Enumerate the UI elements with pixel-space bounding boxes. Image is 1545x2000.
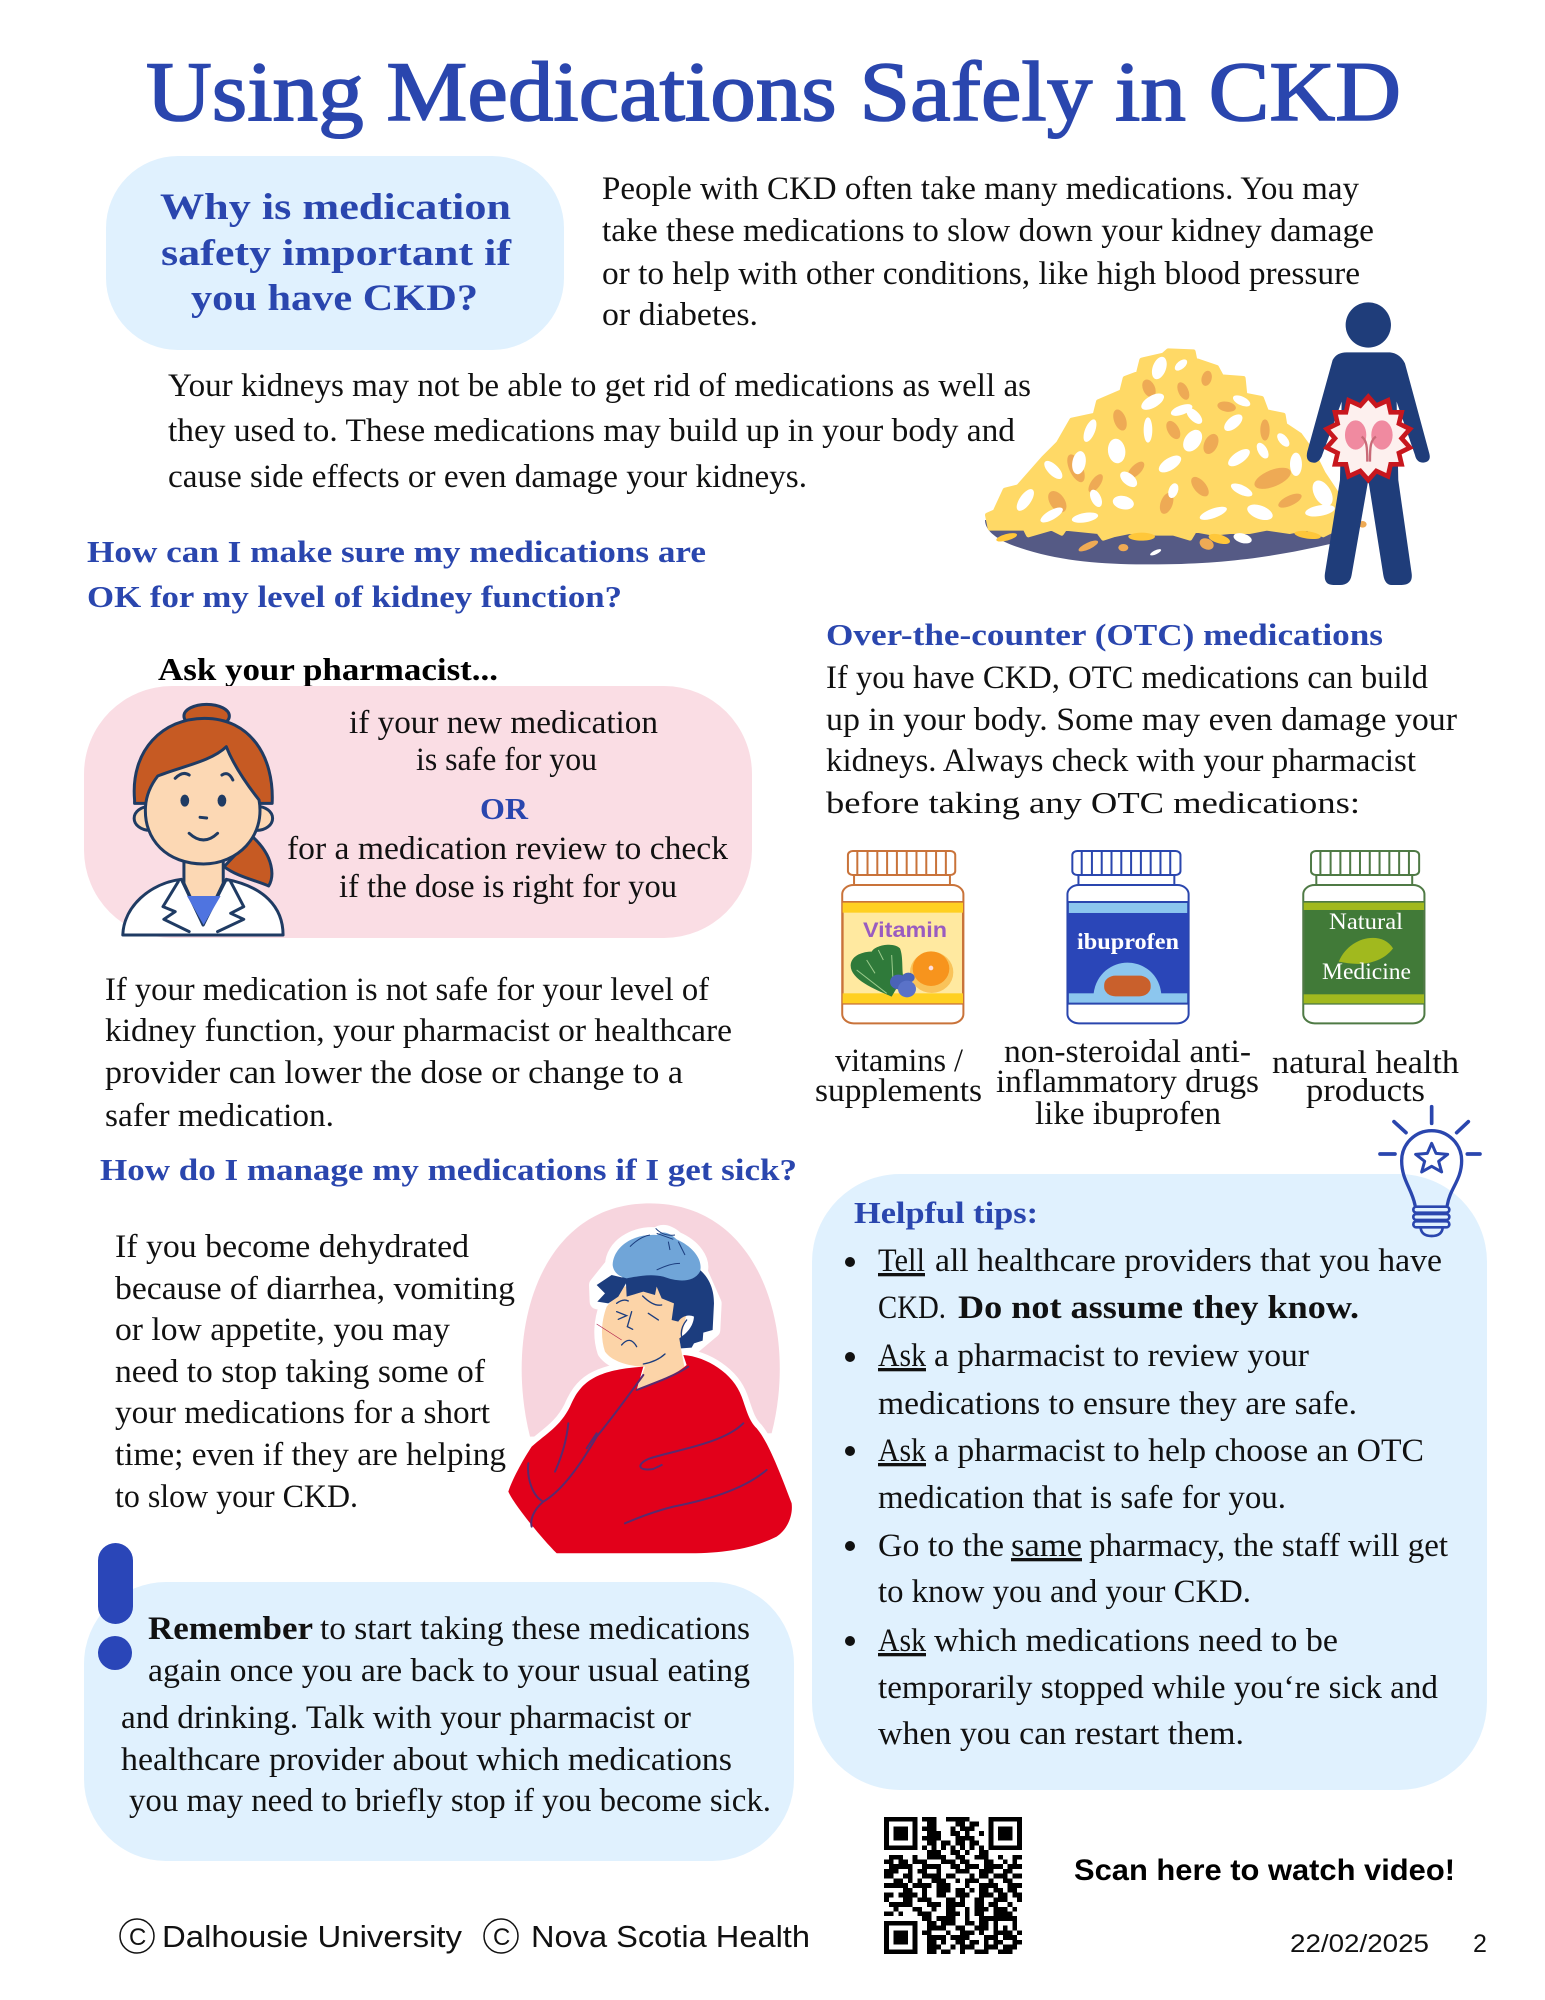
icon: vitamin bottle	[842, 851, 963, 1023]
text block: OTC paragraph: up in your body. Some may even damage your	[826, 702, 1457, 738]
text block: intro paragraph: People with CKD often take many medications. You may	[602, 171, 1359, 207]
text block: kidneys paragraph: they used to. These medications may build up in your body and	[168, 413, 1015, 449]
footer: Nova Scotia Health copyright: C	[493, 1924, 510, 1951]
footer: Dalhousie University copyright: C	[129, 1924, 146, 1951]
list: tips: all healthcare providers that you have	[935, 1243, 1442, 1279]
list: tips: a pharmacist to help choose an OTC	[934, 1433, 1424, 1469]
text block: pharmacist questions: for a medication review to check	[287, 831, 729, 867]
icon: natural medicine bottle: Natural	[1329, 909, 1403, 934]
list: tips: which medications need to be	[934, 1623, 1338, 1659]
heading: ask your pharmacist: Ask your pharmacist...	[158, 651, 498, 687]
panel: ask your pharmacist	[84, 686, 752, 938]
text block: sick paragraph: If you become dehydrated	[115, 1229, 470, 1265]
footer: Nova Scotia Health copyright: Nova Scotia Health	[531, 1919, 810, 1954]
list: tips: Do not assume they know.	[958, 1290, 1359, 1326]
label: NSAIDs: non-steroidal anti-	[1004, 1034, 1251, 1070]
panel: why is medication safety important: you have CKD?	[191, 278, 478, 319]
text block: unsafe medication paragraph: kidney function, your pharmacist or healthcare	[105, 1013, 732, 1049]
list: tips: CKD.	[878, 1290, 946, 1326]
text block: pharmacist questions: OR	[480, 791, 529, 826]
illustration: pile of pills and person with kidneys	[985, 302, 1430, 585]
text block: unsafe medication paragraph: safer medication.	[105, 1098, 334, 1134]
list: tips: Tell	[878, 1243, 925, 1279]
text block: intro paragraph: or diabetes.	[602, 297, 758, 333]
icon: lightbulb	[1380, 1107, 1480, 1236]
panel: why is medication safety important: safety important if	[161, 233, 512, 274]
text block: OTC paragraph: kidneys. Always check with your pharmacist	[826, 743, 1416, 779]
list: tips: Ask	[878, 1433, 926, 1469]
text block: pharmacist questions: if your new medication	[349, 705, 658, 741]
heading: helpful tips: Helpful tips:	[854, 1195, 1038, 1230]
icon: person	[1307, 302, 1430, 585]
label: NSAIDs	[996, 1034, 1259, 1132]
list: tips	[845, 1243, 1448, 1752]
list: tips: medication that is safe for you.	[878, 1480, 1286, 1516]
list: tips: a pharmacist to review your	[934, 1338, 1309, 1374]
text block: kidneys paragraph	[168, 368, 1031, 495]
title: Using Medications Safely in CKD	[146, 45, 1401, 139]
list: tips: pharmacy, the staff will get	[1089, 1528, 1448, 1564]
text block: pharmacist questions	[287, 705, 729, 905]
icon: ibuprofen bottle: ibuprofen	[1077, 929, 1179, 954]
label: natural health products	[1272, 1045, 1460, 1109]
heading: level of kidney function: OK for my level of kidney function?	[87, 579, 622, 614]
text block: OTC paragraph: If you have CKD, OTC medications can build	[826, 660, 1428, 696]
text block: sick paragraph	[115, 1229, 515, 1515]
text block: pharmacist questions: is safe for you	[416, 742, 597, 778]
label: vitamins: supplements	[815, 1073, 982, 1109]
text block: pharmacist questions: if the dose is right for you	[339, 869, 677, 905]
text: scan here: Scan here to watch video!	[1074, 1854, 1455, 1887]
text block: kidneys paragraph: cause side effects or even damage your kidneys.	[168, 459, 807, 495]
QR code	[884, 1817, 1022, 1954]
heading: level of kidney function	[87, 534, 706, 614]
panel: why is medication safety important	[106, 156, 564, 350]
list: tips: when you can restart them.	[878, 1716, 1244, 1752]
label: natural health products: products	[1306, 1073, 1425, 1109]
label: natural health products: natural health	[1272, 1045, 1460, 1081]
text block: sick paragraph: or low appetite, you may	[115, 1312, 450, 1348]
footer: page number: 2	[1473, 1930, 1487, 1958]
text block: sick paragraph: time; even if they are helping	[115, 1437, 506, 1473]
text block: remember paragraph: again once you are back to your usual eating	[148, 1653, 750, 1689]
text block: sick paragraph: because of diarrhea, vomiting	[115, 1271, 515, 1307]
list: tips: temporarily stopped while you‘re sick and	[878, 1670, 1438, 1706]
text block: sick paragraph: your medications for a short	[115, 1395, 490, 1431]
icon: pharmacist	[123, 704, 283, 935]
icon: vitamin bottle: Vitamin	[863, 919, 947, 942]
label: vitamins	[815, 1043, 982, 1109]
text block: remember paragraph: to start taking these medications	[320, 1611, 750, 1647]
icon: natural medicine bottle: Medicine	[1322, 959, 1411, 984]
text block: OTC paragraph	[826, 660, 1457, 820]
list: tips: Ask	[878, 1623, 926, 1659]
list: tips: medications to ensure they are safe.	[878, 1386, 1357, 1422]
icon: ibuprofen bottle	[1067, 851, 1189, 1023]
footer: Dalhousie University copyright: Dalhousie University	[162, 1919, 463, 1954]
label: vitamins: vitamins /	[835, 1043, 964, 1079]
panel: helpful tips	[812, 1174, 1487, 1790]
illustration: sick person in blanket	[508, 1203, 792, 1553]
text block: unsafe medication paragraph: provider can lower the dose or change to a	[105, 1055, 683, 1091]
heading: over-the-counter medications: Over-the-counter (OTC) medications	[826, 617, 1383, 652]
list: tips: same	[1011, 1528, 1082, 1564]
text block: intro paragraph	[602, 171, 1374, 333]
text block: sick paragraph: to slow your CKD.	[115, 1479, 358, 1515]
list: tips: Go to the	[878, 1528, 1004, 1564]
text block: intro paragraph: or to help with other conditions, like high blood pressure	[602, 256, 1360, 292]
text block: remember paragraph: you may need to briefly stop if you become sick.	[129, 1783, 771, 1819]
icon: natural medicine bottle	[1303, 851, 1424, 1023]
text block: remember paragraph: healthcare provider about which medications	[121, 1742, 732, 1778]
panel: remember callout	[84, 1582, 794, 1861]
label: NSAIDs: inflammatory drugs	[996, 1064, 1259, 1100]
text block: intro paragraph: take these medications to slow down your kidney damage	[602, 213, 1374, 249]
heading: manage when sick: How do I manage my medications if I get sick?	[100, 1152, 797, 1187]
list: tips: Ask	[878, 1338, 926, 1374]
text block: kidneys paragraph: Your kidneys may not be able to get rid of medications as well as	[168, 368, 1031, 404]
panel: why is medication safety important: Why is medication	[160, 187, 511, 228]
text block: OTC paragraph: before taking any OTC medications:	[826, 785, 1360, 820]
footer: date: 22/02/2025	[1290, 1930, 1429, 1958]
icon: exclamation mark	[98, 1543, 133, 1670]
text block: unsafe medication paragraph: If your medication is not safe for your level of	[105, 972, 709, 1008]
text block: remember paragraph: Remember	[148, 1611, 313, 1647]
text block: sick paragraph: need to stop taking some of	[115, 1354, 485, 1390]
text block: remember paragraph: and drinking. Talk with your pharmacist or	[121, 1700, 691, 1736]
text block: remember paragraph	[121, 1611, 771, 1819]
text block: unsafe medication paragraph	[105, 972, 732, 1134]
heading: level of kidney function: How can I make sure my medications are	[87, 534, 706, 569]
label: NSAIDs: like ibuprofen	[1035, 1096, 1221, 1132]
list: tips: to know you and your CKD.	[878, 1574, 1251, 1610]
